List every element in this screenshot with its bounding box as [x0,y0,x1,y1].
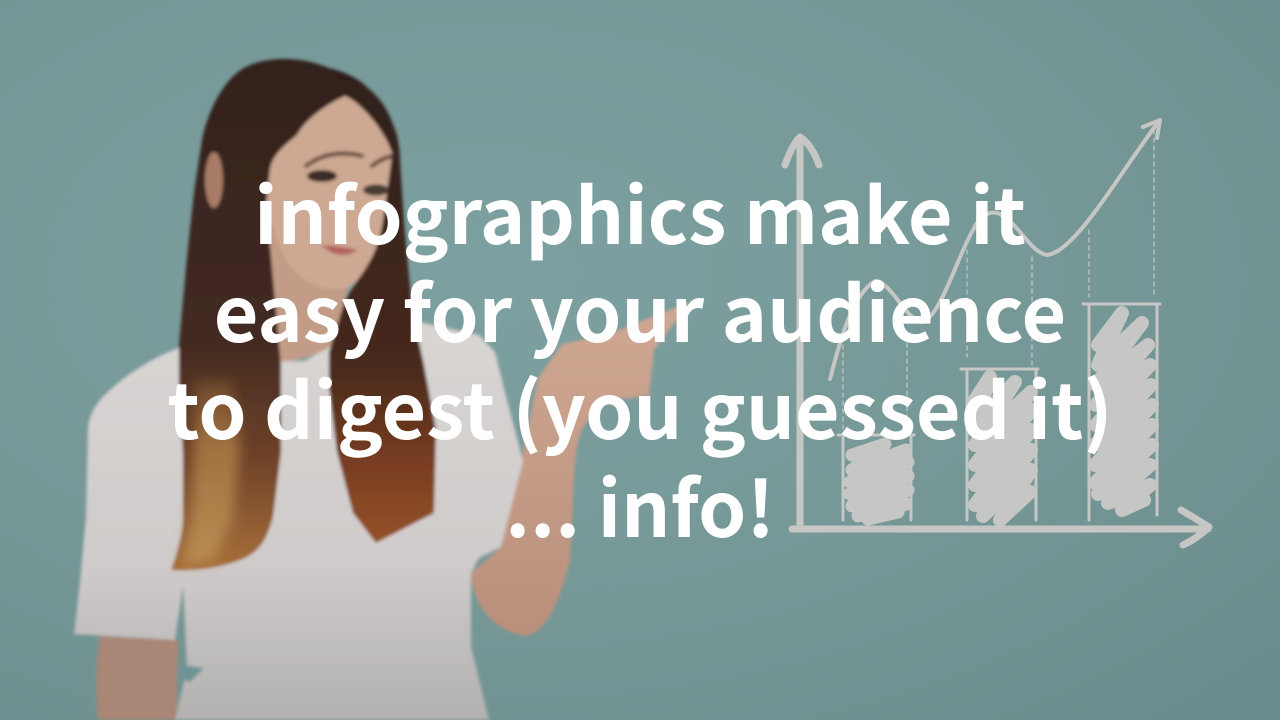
ear [205,152,223,208]
waist gap [176,664,204,682]
t-shirt [74,318,523,720]
x axis [792,510,1209,545]
hair left lock [171,59,345,570]
lips [321,245,358,255]
scribble 2 [975,377,1031,520]
scribble 1 [850,444,908,519]
headline [167,156,1113,560]
hand-drawn chart [785,120,1209,545]
headline: ... info! [505,448,775,560]
headline: to digest (you guessed it) [167,351,1113,462]
y axis [785,137,819,525]
bar 1 outline [838,435,914,520]
eye left [307,170,337,182]
hair blond streak [184,380,240,564]
headline: easy for your audience [214,254,1066,364]
woman figure [74,59,690,720]
eye right [363,184,389,196]
dotted guide lines [843,130,1154,433]
headline: infographics make it [254,156,1026,267]
left arm [96,636,178,720]
bar 2 outline [961,369,1038,520]
pointing arm and hand [471,302,690,636]
trend line [830,121,1159,379]
face [266,96,392,289]
hair right lock [329,68,436,543]
scribble 3 [1095,313,1152,510]
eyebrow right [372,156,392,166]
neck [258,215,362,362]
eyebrow left [306,154,362,166]
bar 3 outline [1083,304,1160,520]
trend arrowhead [1143,120,1160,138]
